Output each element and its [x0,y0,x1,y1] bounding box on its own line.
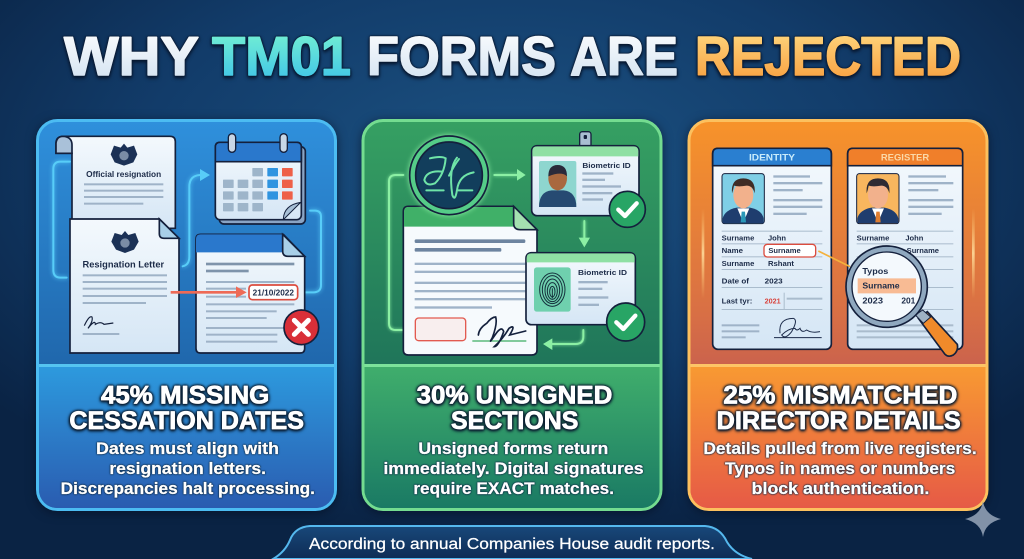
panel text: missing cessation dates: 45% MISSING [101,381,269,409]
title: REJECTED [695,25,961,87]
panel text: missing cessation dates [61,381,315,498]
identity card: 2023 [765,276,783,285]
register card [848,148,963,349]
register card: REGISTER [881,153,930,163]
panel text: mismatched director details: DIRECTOR DETAILS [717,407,961,435]
identity card: John [768,233,786,242]
magnifying glass [846,246,958,356]
identity card [713,148,831,349]
date field [249,285,298,300]
panel text: mismatched director details: Typos in names or numbers [725,459,955,478]
title [64,25,961,87]
illustration: identity and register comparison [702,148,975,356]
magnifying glass: 201 [901,295,916,305]
panel text: missing cessation dates: CESSATION DATES [69,407,304,435]
panel text: missing cessation dates: Dates must align with [96,439,279,458]
illustration: resignation documents and calendar [53,134,321,353]
identity card: Surname [768,246,801,255]
panel text: missing cessation dates: Discrepancies halt processing. [61,479,315,498]
panel text: mismatched director details: Details pulled from live registers. [703,439,977,458]
magnifying glass: Surname [862,281,900,291]
date field: 21/10/2022 [253,287,294,297]
panel text: unsigned sections: SECTIONS [451,407,578,435]
panel text: mismatched director details: 25% MISMATCHED [723,381,957,409]
panel text: unsigned sections: require EXACT matches. [413,479,614,498]
panel text: unsigned sections: immediately. Digital signatures [383,459,644,478]
document with signature [403,206,537,355]
magnifying glass: Typos [862,266,889,276]
identity card: IDENTITY [749,153,795,163]
panel: missing cessation dates [38,120,336,510]
identity card: Surname [722,259,754,268]
panel: mismatched director details [689,120,987,510]
arrow: letter to date [171,286,247,298]
panel text: unsigned sections: 30% UNSIGNED [417,381,612,409]
official resignation document: Official resignation [86,170,161,179]
title: ARE [570,25,678,87]
icon: rejected cross [284,310,319,345]
register card: Surname [907,246,939,255]
panel: unsigned sections [363,120,661,510]
biometric ID card: portrait [532,132,639,216]
panel text: unsigned sections: Unsigned forms return [418,439,608,458]
footer source note [273,526,752,559]
TM01 form with wrong date [196,234,305,353]
resignation letter: Resignation Letter [82,260,165,270]
biometric ID card: fingerprint [526,253,635,325]
magnifying glass: 2023 [862,295,883,305]
calendar [215,134,305,224]
illustration: signature and biometric checks [389,132,645,355]
identity card: Last tyr: [722,297,752,306]
connector: name to magnifier [818,251,850,267]
biometric ID card: fingerprint: Biometric ID [578,268,627,277]
title: FORMS [367,25,556,87]
identity card: Name [722,246,743,255]
panel text: missing cessation dates: resignation letters. [109,459,266,478]
identity card: Surname [722,233,754,242]
identity card: Rshant [768,259,794,268]
panel text: mismatched director details: block authentication. [752,479,929,498]
identity card: Date of [722,276,749,285]
biometric ID card: portrait: Biometric ID [582,161,631,170]
identity card: 2021 [765,297,781,306]
icon: check one [609,191,645,227]
official resignation document [56,136,175,228]
register card: John [905,233,924,242]
title: TM01 [212,25,351,87]
panel text: mismatched director details [703,381,977,498]
title: WHY [64,25,199,87]
resignation letter [70,219,179,353]
register card: Surname [857,233,889,242]
footer source note: According to annual Companies House audit reports. [309,536,715,553]
icon: sparkle [965,501,1001,537]
panel text: unsigned sections [383,381,644,498]
icon: check two [607,303,645,341]
signature seal [410,136,488,215]
